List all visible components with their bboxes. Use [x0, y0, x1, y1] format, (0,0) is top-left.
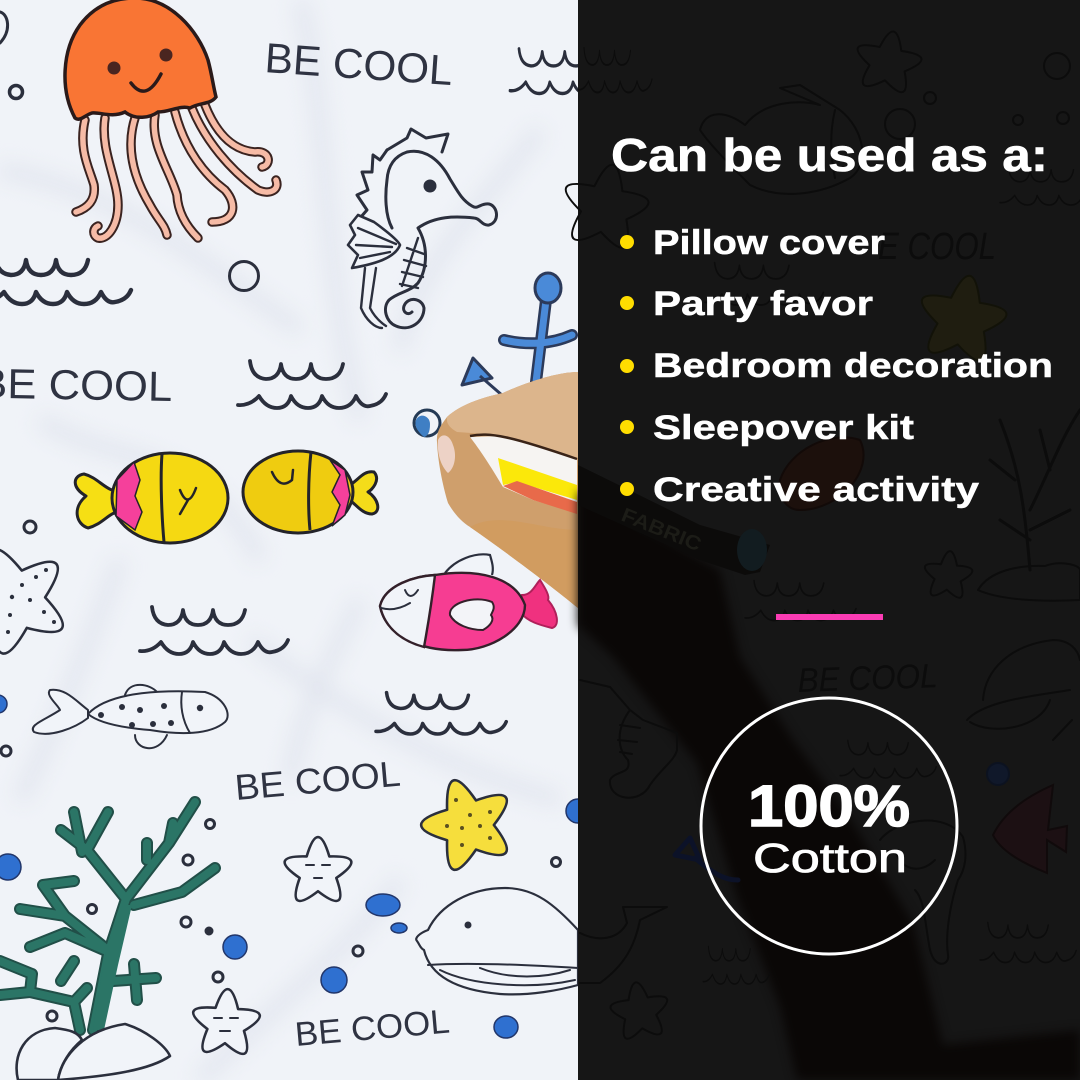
bubbles: outlined [0, 12, 560, 1021]
seahorse [348, 129, 497, 328]
wave: top right [510, 49, 621, 94]
item: party favor: Party favor [653, 285, 873, 323]
ghost: wave top left [578, 48, 652, 92]
starfish: yellow [411, 767, 523, 876]
wave: upper left [0, 257, 131, 304]
ghost: fish [700, 85, 862, 194]
anchor [462, 273, 572, 396]
ghost: turtle [967, 640, 1080, 740]
marker [470, 435, 577, 514]
wave: mid left [140, 607, 288, 654]
text: be cool bottom: BE COOL [293, 1003, 451, 1054]
starfish: outline bottom [191, 987, 261, 1055]
ghost: wave right [1000, 167, 1080, 205]
coral [0, 802, 215, 1030]
ghost: wave mid [705, 263, 823, 305]
fish: yellow left [75, 453, 228, 543]
fish: yellow right [243, 451, 378, 533]
text: be cool top: BE COOL [263, 34, 454, 94]
ghost: star left [557, 157, 654, 251]
ghost: whale tail [580, 907, 667, 983]
ghost: wave circle top [840, 740, 936, 778]
dark arm shadow [578, 490, 1080, 1080]
ghost: jellyfish [880, 821, 965, 964]
bubbles: blue [0, 695, 590, 1038]
hand holding marker [437, 372, 578, 608]
ghost: marker cap [578, 465, 770, 575]
badge: 100% cotton: Cotton [753, 835, 907, 881]
item: pillow cover: Pillow cover [653, 224, 885, 262]
panel: dark overlay background [557, 0, 1080, 1080]
ghost: be cool text upper: E COOL [878, 226, 996, 268]
ghost: seahorse [580, 680, 677, 798]
whale [416, 888, 578, 994]
ghost: wave lower [703, 946, 770, 984]
starfish: dotted [0, 529, 81, 662]
bubble: being coloured [414, 410, 440, 437]
ghost: wave near bar [745, 581, 856, 620]
ghost: be cool text lower: BE COOL [797, 657, 938, 700]
rocks [17, 1024, 170, 1080]
ghost: coral [990, 410, 1080, 570]
fish: dotted outline [33, 685, 228, 748]
ghost: wave lower right [980, 923, 1076, 962]
ghost: star bottom [608, 978, 672, 1041]
item: sleepover kit: Sleepover kit [653, 409, 914, 447]
badge: 100% cotton: 100% [748, 774, 910, 839]
ghost: blue bubble [987, 763, 1009, 785]
heading: Can be used as a: [611, 129, 1048, 181]
jellyfish [65, 0, 277, 238]
ghost: crab [780, 437, 864, 510]
badge: 100% cotton [701, 698, 957, 954]
ghost: star top [851, 26, 925, 95]
list: uses [620, 224, 1053, 509]
ghost: rocks [978, 563, 1080, 601]
wave: lower right [376, 693, 506, 734]
ghost: marker cap: FABRIC [618, 504, 704, 556]
wave: center [238, 361, 386, 408]
ghost: bubbles [885, 53, 1070, 139]
fish: pink [380, 554, 557, 650]
ghost: star low [922, 549, 974, 599]
item: bedroom decoration: Bedroom decoration [653, 347, 1053, 385]
starfish: outline small [285, 837, 351, 901]
ghost: anchor arrow [675, 838, 738, 880]
text: be cool center: BE COOL [233, 753, 402, 808]
item: creative activity: Creative activity [653, 471, 979, 509]
panel: coloring fabric photo [0, 0, 621, 1080]
divider: pink bar [776, 614, 883, 620]
ghost: red fish [993, 785, 1067, 873]
ghost: star yellow [913, 268, 1012, 364]
